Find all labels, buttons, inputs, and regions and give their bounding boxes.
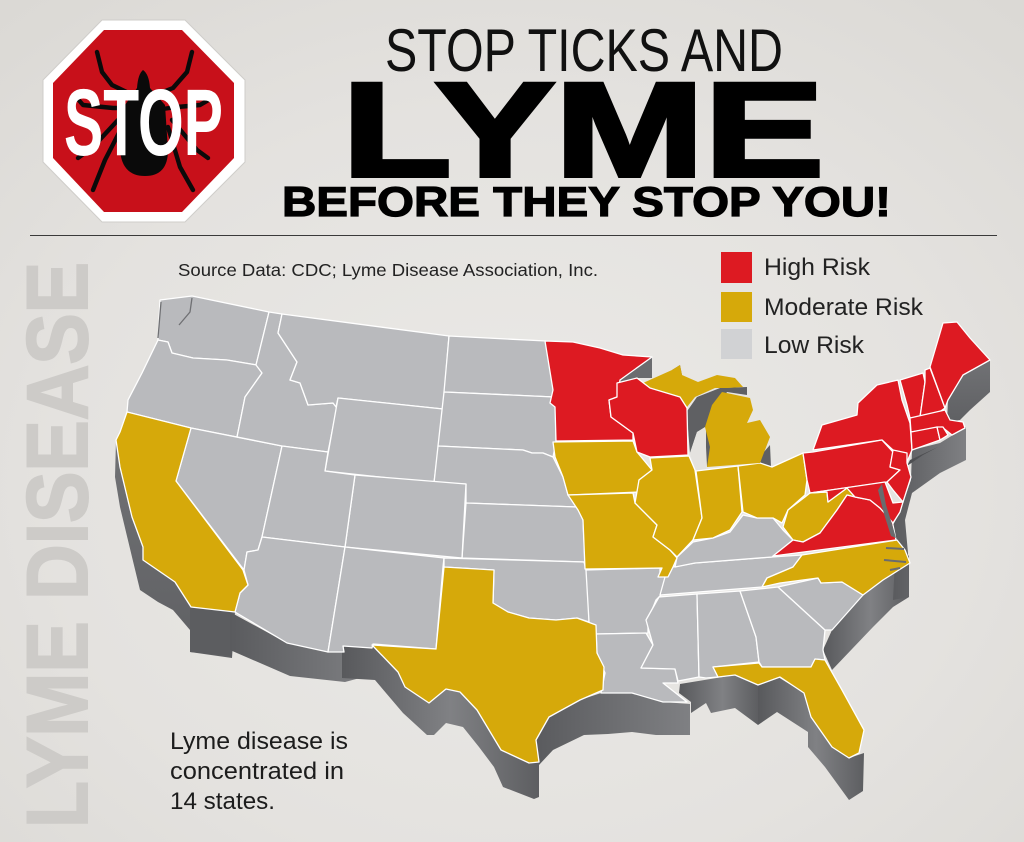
callout: 14 states	[170, 728, 348, 815]
state: Oklahoma	[444, 558, 589, 622]
state: Iowa	[553, 441, 652, 495]
state: Georgia	[740, 587, 825, 667]
source note: Source Data: CDC; Lyme Disease Association, Inc.	[178, 260, 598, 280]
state: Alabama	[697, 591, 759, 678]
legend: high risk: High Risk	[764, 254, 871, 281]
state: Minnesota	[545, 341, 652, 441]
3D map extrusion shadows	[115, 357, 990, 800]
state: New Jersey	[887, 450, 911, 502]
state: Wyoming	[325, 398, 443, 483]
state: North Dakota	[444, 336, 554, 397]
legend: high risk	[721, 252, 871, 283]
state: Florida	[713, 659, 864, 758]
state: Indiana	[693, 466, 742, 540]
state: Maine	[930, 322, 990, 408]
state: Missouri	[568, 493, 677, 577]
state: Illinois	[635, 456, 702, 557]
legend: moderate risk	[721, 292, 924, 322]
title: stop ticks and: STOP TICKS AND	[385, 17, 783, 84]
state: Oregon	[127, 340, 262, 437]
state: New Hampshire	[920, 368, 945, 417]
state: Arizona	[235, 537, 345, 652]
Chesapeake Bay	[878, 484, 896, 538]
legend: low risk	[721, 329, 865, 359]
high risk states	[545, 322, 990, 556]
moderate risk states	[116, 365, 910, 763]
map of US states	[116, 296, 990, 763]
state: Washington	[158, 296, 269, 365]
callout: 14 states: Lyme disease is	[170, 728, 348, 755]
state: Arkansas	[586, 568, 670, 634]
state: Pennsylvania	[803, 440, 900, 493]
title: LYME: LYME	[342, 56, 824, 205]
lake shadows	[683, 387, 747, 467]
icon: tick	[77, 52, 212, 190]
vertical watermark: lyme disease: LYME DISEASE	[10, 262, 106, 828]
state: Vermont	[900, 373, 925, 418]
legend: low risk: Low Risk	[764, 332, 865, 359]
state: California	[116, 412, 248, 612]
state: Michigan upper peninsula	[643, 365, 743, 407]
legend	[721, 252, 924, 359]
low risk states	[127, 296, 863, 702]
state: Mississippi	[641, 594, 699, 681]
state: Louisiana	[596, 633, 687, 702]
state: Tennessee	[660, 555, 802, 595]
state: Montana	[278, 314, 449, 409]
legend: moderate risk: Moderate Risk	[764, 294, 924, 321]
state: Connecticut	[911, 427, 940, 450]
state: Nebraska	[434, 446, 577, 507]
subtitle: before they stop you: BEFORE THEY STOP YOU!	[282, 178, 891, 225]
state: Wisconsin	[609, 378, 688, 457]
Puget Sound	[158, 298, 192, 338]
callout: 14 states: concentrated in	[170, 758, 344, 785]
state: North Carolina	[762, 540, 910, 595]
state: Michigan lower peninsula	[705, 392, 770, 467]
state: South Dakota	[438, 392, 556, 457]
state: Utah	[262, 446, 355, 547]
state: Virginia	[773, 495, 896, 556]
state: Kansas	[462, 503, 585, 562]
state: Colorado	[345, 475, 466, 558]
state: West Virginia	[783, 488, 855, 542]
state: New York	[813, 380, 912, 462]
state: Massachusetts	[910, 410, 965, 435]
sign text: STOP: STOP	[64, 70, 223, 176]
state: Maryland	[810, 482, 903, 523]
state: Nevada	[176, 428, 282, 570]
state: Idaho	[237, 312, 337, 452]
North Carolina sounds	[884, 548, 906, 570]
state: Kentucky	[675, 515, 793, 567]
state: Ohio	[738, 453, 807, 523]
state: Texas	[372, 567, 604, 763]
callout: 14 states: 14 states.	[170, 788, 275, 815]
stop sign with tick	[43, 20, 245, 222]
state: New Mexico	[328, 547, 444, 652]
state: Rhode Island	[937, 427, 948, 440]
state: South Carolina	[778, 578, 863, 630]
